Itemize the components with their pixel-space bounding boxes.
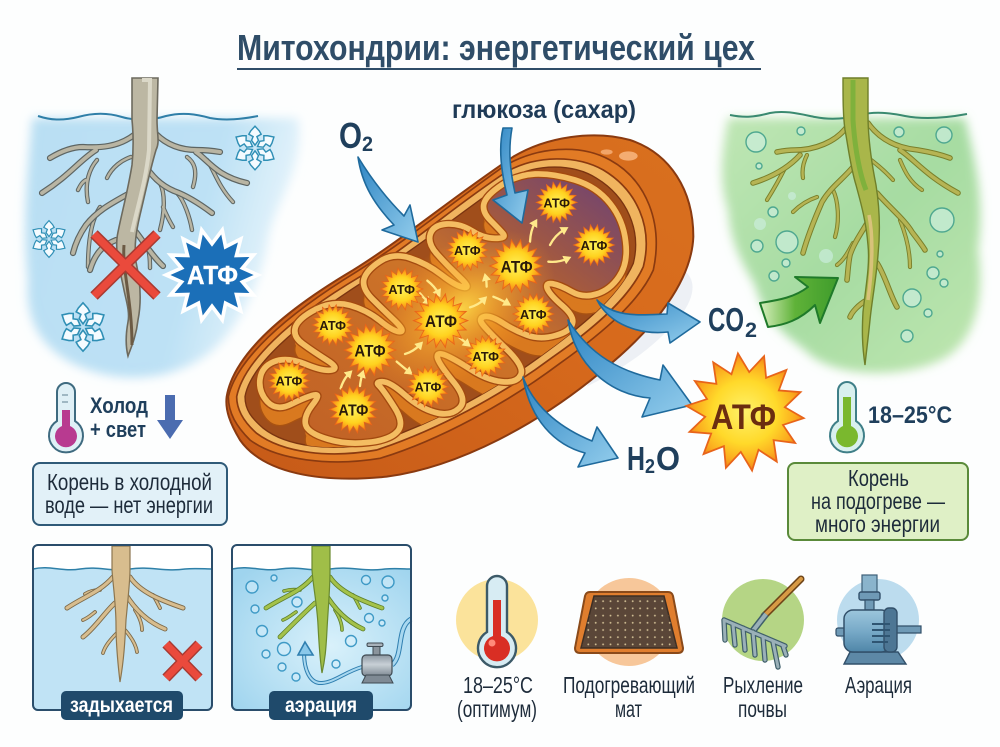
label: H2O: 2 bbox=[645, 456, 655, 478]
inner membrane cristae bbox=[260, 174, 626, 443]
rim inner band bbox=[237, 159, 646, 454]
title: Митохондрии: энергетический цех bbox=[237, 27, 755, 68]
red cross bbox=[166, 644, 199, 678]
ATP star 2: АТФ bbox=[581, 238, 607, 253]
ATP star 13: АТФ bbox=[338, 402, 368, 419]
red cross bbox=[94, 234, 157, 296]
label: H2O bbox=[627, 440, 680, 478]
green root bbox=[753, 78, 958, 365]
cut rim bbox=[228, 149, 656, 462]
label: O2: 2 bbox=[362, 133, 373, 156]
big ATP burst: АТФ bbox=[711, 398, 776, 437]
panel: suffocating root bbox=[33, 545, 212, 720]
label: aeration bbox=[269, 691, 373, 720]
snowflake left bbox=[30, 221, 68, 257]
label: warm temperature: 18–25°C bbox=[868, 402, 952, 429]
label: 18-25 optimum: (оптимум) bbox=[457, 696, 537, 722]
label: CO2: CO bbox=[708, 301, 744, 338]
ATP star 1: АТФ bbox=[543, 195, 570, 210]
callout: root in cold water: воде — нет энергии bbox=[45, 492, 213, 518]
ATP star 13 bbox=[329, 386, 377, 433]
panel: aerated root bbox=[232, 545, 411, 720]
label: aeration: Аэрация bbox=[845, 672, 912, 698]
label: heating mat bbox=[563, 672, 695, 722]
water surface line bbox=[38, 114, 258, 120]
arrow: oxygen in bbox=[358, 157, 418, 242]
icon: optimum temperature bbox=[456, 576, 538, 667]
air hose bbox=[392, 619, 411, 665]
label: heating mat: Подогревающий bbox=[563, 672, 695, 698]
ATP star 5: АТФ bbox=[388, 282, 415, 297]
label: soil loosening: почвы bbox=[738, 696, 787, 722]
label: suffocating: задыхается bbox=[70, 694, 173, 717]
blue ATP star bbox=[166, 230, 258, 320]
ATP star 8 bbox=[465, 336, 506, 376]
ATP star 9 bbox=[312, 305, 353, 345]
matrix cavity bbox=[245, 167, 636, 447]
ATP star 1 bbox=[536, 182, 577, 223]
panel: cold root in icy water bbox=[25, 78, 299, 378]
callout: root in cold water: Корень в холодной bbox=[47, 469, 212, 495]
ATP star 8: АТФ bbox=[472, 349, 499, 364]
panel border bbox=[232, 545, 411, 710]
bubbles bbox=[746, 127, 954, 342]
small energy arrows bbox=[341, 223, 567, 388]
callout: root on heating bbox=[788, 463, 968, 540]
ATP star 12: АТФ bbox=[415, 380, 441, 395]
green root bbox=[266, 546, 382, 673]
warm thermometer bbox=[830, 382, 864, 452]
label: 18-25 optimum bbox=[457, 672, 537, 722]
highlight bbox=[601, 149, 638, 161]
ATP star 3 bbox=[489, 240, 543, 292]
grey root bbox=[42, 78, 247, 356]
label: glucose: глюкоза (сахар) bbox=[452, 96, 636, 124]
icon: aeration pump bbox=[836, 575, 921, 664]
ATP star 10 bbox=[344, 324, 396, 376]
arrow: warm energy in bbox=[760, 277, 838, 327]
label: soil loosening bbox=[723, 672, 803, 722]
icon: rake bbox=[722, 579, 804, 667]
ATP star 4 bbox=[447, 230, 488, 270]
label: O2: O bbox=[339, 115, 362, 156]
green water background bbox=[722, 118, 980, 373]
label: CO2: 2 bbox=[745, 319, 757, 342]
ATP star 4: АТФ bbox=[454, 243, 481, 258]
snowflake right bbox=[233, 126, 277, 170]
ATP star 5 bbox=[380, 268, 423, 310]
callout: root on heating: на подогреве — bbox=[811, 488, 945, 514]
cold and light label: Холод bbox=[90, 393, 148, 418]
icon: heating mat bbox=[575, 578, 683, 666]
label: suffocating bbox=[61, 691, 183, 720]
label: soil loosening: Рыхление bbox=[723, 672, 803, 698]
outer membrane bbox=[226, 135, 693, 479]
water surface line bbox=[730, 112, 967, 119]
aerated water bbox=[232, 568, 411, 710]
cold and light label bbox=[90, 393, 148, 442]
ATP star 10: АТФ bbox=[354, 341, 386, 360]
big ATP burst bbox=[680, 349, 810, 475]
ATP star 7 bbox=[513, 294, 554, 334]
ATP star 7: АТФ bbox=[520, 307, 547, 322]
label: heating mat: мат bbox=[615, 696, 642, 722]
callout: root on heating: много энергии bbox=[815, 511, 940, 537]
callout: root in cold water bbox=[33, 463, 227, 525]
ATP star 3: АТФ bbox=[501, 257, 533, 276]
callout: root on heating: Корень bbox=[848, 465, 909, 491]
ATP star 9: АТФ bbox=[319, 318, 346, 333]
label: aeration: аэрация bbox=[285, 694, 357, 717]
cold and light label: + свет bbox=[90, 417, 146, 442]
arrow: CO2 out bbox=[597, 300, 700, 343]
cristae depth bbox=[260, 220, 627, 448]
snowflake bottom bbox=[59, 303, 107, 351]
label: H2O: H bbox=[627, 440, 645, 477]
label: H2O: O bbox=[656, 440, 680, 477]
icy water background bbox=[25, 118, 299, 378]
tan root bbox=[67, 546, 183, 682]
label: 18-25 optimum: 18–25°C bbox=[463, 672, 533, 698]
ATP star 12 bbox=[407, 366, 449, 407]
panel border bbox=[33, 545, 212, 710]
aeration pump bbox=[362, 643, 393, 683]
arrow: water out bbox=[523, 377, 618, 467]
air arrow bbox=[298, 642, 362, 683]
arrow: ATP out bbox=[568, 320, 692, 417]
shadow bbox=[587, 263, 693, 387]
arrow: temperature down bbox=[157, 395, 183, 439]
ATP star 6: АТФ bbox=[425, 312, 457, 331]
mitochondrion bbox=[226, 135, 693, 479]
panel: warm root in green water bbox=[722, 78, 980, 373]
cold thermometer bbox=[49, 383, 83, 452]
bubbles bbox=[246, 575, 394, 681]
ATP star 6 bbox=[413, 294, 468, 348]
ATP star 2 bbox=[573, 225, 615, 265]
ATP star 11 bbox=[268, 360, 310, 401]
water bbox=[33, 568, 212, 710]
arrow: glucose in bbox=[493, 128, 528, 223]
central glow bbox=[336, 197, 584, 423]
ATP star 11: АТФ bbox=[276, 374, 302, 389]
blue ATP star: АТФ bbox=[187, 260, 238, 290]
